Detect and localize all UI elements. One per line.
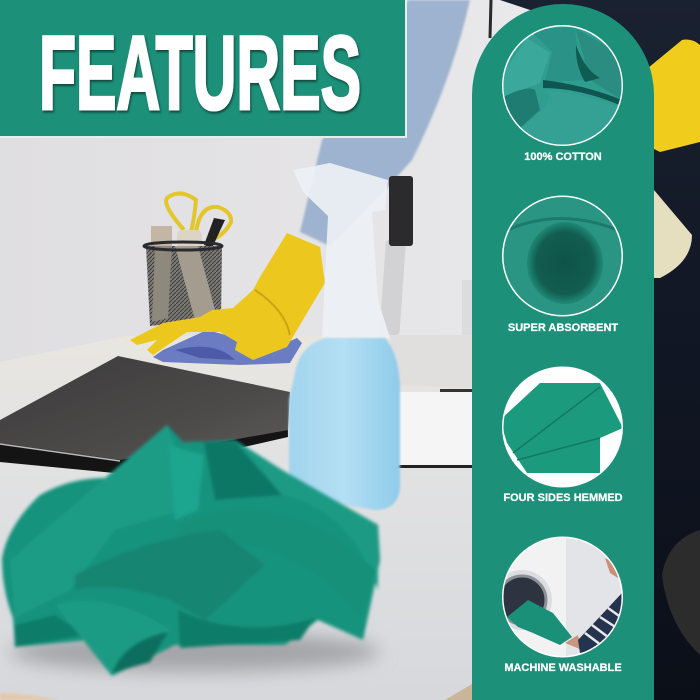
- feature: super absorbent: [500, 194, 625, 334]
- pen holder: [144, 193, 231, 326]
- feature: machine washable: [502, 536, 623, 672]
- arm sleeve: [300, 0, 470, 246]
- icon: folded towel: [500, 366, 623, 488]
- spray bottle: [289, 163, 400, 510]
- lanyard: [490, 0, 491, 38]
- panel: features column: [472, 4, 654, 700]
- back laptop and cable: [390, 335, 472, 468]
- dark right side of photo: [500, 0, 700, 700]
- title: FEATURES: [39, 15, 361, 132]
- title banner: [0, 0, 407, 138]
- teal towel pile: [2, 425, 380, 676]
- icon: absorbent stain: [500, 194, 625, 319]
- vacuum handle: [379, 176, 413, 335]
- blue cloth: [153, 330, 302, 365]
- label: MACHINE WASHABLE: [504, 662, 622, 674]
- label: SUPER ABSORBENT: [508, 322, 618, 334]
- yellow glove: [130, 233, 325, 360]
- label: FOUR SIDES HEMMED: [503, 492, 623, 504]
- feature: 100% cotton: [500, 24, 625, 163]
- feature: four sides hemmed: [500, 366, 623, 504]
- laptop: [0, 356, 290, 474]
- shadow under towel: [10, 632, 380, 672]
- icon: cotton fabric close-up: [500, 24, 625, 150]
- icon: washing machine: [502, 536, 623, 658]
- label: 100% COTTON: [524, 151, 602, 163]
